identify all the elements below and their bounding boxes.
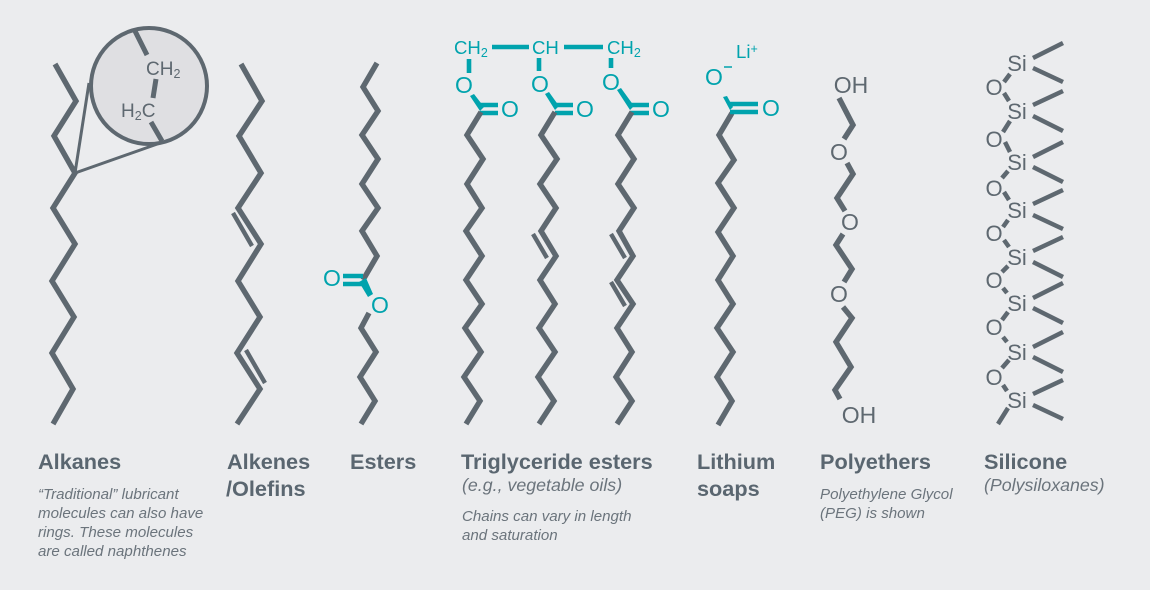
label: lithium soaps: soaps	[697, 476, 760, 501]
oxygen atoms: O	[985, 75, 1003, 100]
methyl groups	[1033, 43, 1063, 419]
molecule: alkanes	[52, 28, 207, 424]
label: polyethers	[820, 449, 953, 522]
molecule: polyethers: OH	[834, 72, 868, 98]
molecule: lithium soaps: +	[750, 42, 758, 56]
silicon atoms: Si	[1007, 245, 1027, 270]
label: triglyceride esters	[461, 449, 653, 544]
glycerol backbone: O	[455, 72, 473, 98]
fatty chain 1	[464, 112, 483, 424]
label: alkenes: Alkenes	[227, 449, 310, 474]
glycerol backbone: CH	[532, 37, 559, 58]
label: triglyceride esters: Triglyceride esters	[461, 449, 653, 474]
magnifier lens: 2	[135, 109, 142, 123]
magnifier lens: H	[121, 101, 135, 122]
glycerol backbone: 2	[481, 46, 488, 60]
molecule: polyethers: O	[841, 209, 859, 235]
molecule: polyethers: OH	[842, 402, 876, 428]
label: alkanes: are called naphthenes	[38, 543, 187, 560]
oxygen atoms: O	[985, 176, 1003, 201]
magnifier lens: C	[142, 101, 155, 122]
silicon atoms	[1007, 51, 1027, 413]
molecule: esters	[323, 63, 389, 424]
label: silicone: (Polysiloxanes)	[984, 475, 1105, 495]
molecule: polyethers: O	[830, 281, 848, 307]
label: polyethers: (PEG) is shown	[820, 505, 925, 522]
molecule: lithium soaps: O	[762, 95, 780, 121]
molecule: alkenes	[233, 64, 265, 424]
label: triglyceride esters: Chains can vary in length	[462, 508, 631, 525]
molecule: esters: O	[323, 265, 341, 291]
glycerol backbone: O	[602, 69, 620, 95]
glycerol backbone: O	[531, 71, 549, 97]
magnifier lens	[75, 28, 207, 173]
label: polyethers: Polyethylene Glycol	[820, 486, 953, 503]
silicon atoms: Si	[1007, 388, 1027, 413]
molecule: triglyceride esters	[454, 37, 670, 424]
magnifier lens: 2	[173, 67, 180, 81]
label: silicone: Silicone	[984, 449, 1067, 474]
oxygen atoms: O	[985, 221, 1003, 246]
glycerol backbone	[454, 37, 670, 122]
molecule: polyethers	[830, 72, 876, 428]
siloxane bonds	[998, 74, 1010, 424]
label: alkenes	[226, 449, 310, 501]
glycerol backbone: CH	[607, 37, 634, 58]
glycerol backbone: O	[652, 96, 670, 122]
silicon atoms: Si	[1007, 51, 1027, 76]
label: triglyceride esters: and saturation	[462, 527, 558, 544]
label: alkanes	[38, 449, 203, 560]
label: esters: Esters	[350, 449, 416, 474]
silicon atoms: Si	[1007, 340, 1027, 365]
label: alkanes: rings. These molecules	[38, 524, 194, 541]
molecule: lithium soaps	[705, 41, 780, 425]
label: alkanes: “Traditional” lubricant	[38, 486, 179, 503]
fatty chain 3	[616, 112, 634, 424]
glycerol backbone: O	[501, 96, 519, 122]
fatty chain 2	[538, 112, 557, 424]
oxygen atoms: O	[985, 315, 1003, 340]
oxygen atoms: O	[985, 365, 1003, 390]
label: triglyceride esters: (e.g., vegetable oils)	[462, 475, 622, 495]
oxygen atoms: O	[985, 127, 1003, 152]
oxygen atoms	[985, 75, 1003, 390]
label: polyethers: Polyethers	[820, 449, 931, 474]
label: lithium soaps: Lithium	[697, 449, 775, 474]
label: lithium soaps	[697, 449, 775, 501]
molecule: esters: O	[371, 292, 389, 318]
oxygen atoms: O	[985, 268, 1003, 293]
label: alkanes: Alkanes	[38, 449, 121, 474]
glycerol backbone: 2	[634, 46, 641, 60]
glycerol backbone: CH	[454, 37, 481, 58]
silicon atoms: Si	[1007, 150, 1027, 175]
label: alkenes: /Olefins	[226, 476, 306, 501]
silicon atoms: Si	[1007, 99, 1027, 124]
molecule: polyethers: O	[830, 139, 848, 165]
molecule: lithium soaps: O	[705, 64, 723, 90]
alkane chain	[52, 64, 76, 424]
silicon atoms: Si	[1007, 291, 1027, 316]
silicon atoms: Si	[1007, 198, 1027, 223]
glycerol backbone: O	[576, 96, 594, 122]
label: silicone	[984, 449, 1105, 495]
label: alkanes: molecules can also have	[38, 505, 203, 522]
molecule: silicone	[985, 43, 1063, 424]
molecule: lithium soaps: Li	[736, 41, 750, 62]
magnifier lens: CH	[146, 59, 173, 80]
